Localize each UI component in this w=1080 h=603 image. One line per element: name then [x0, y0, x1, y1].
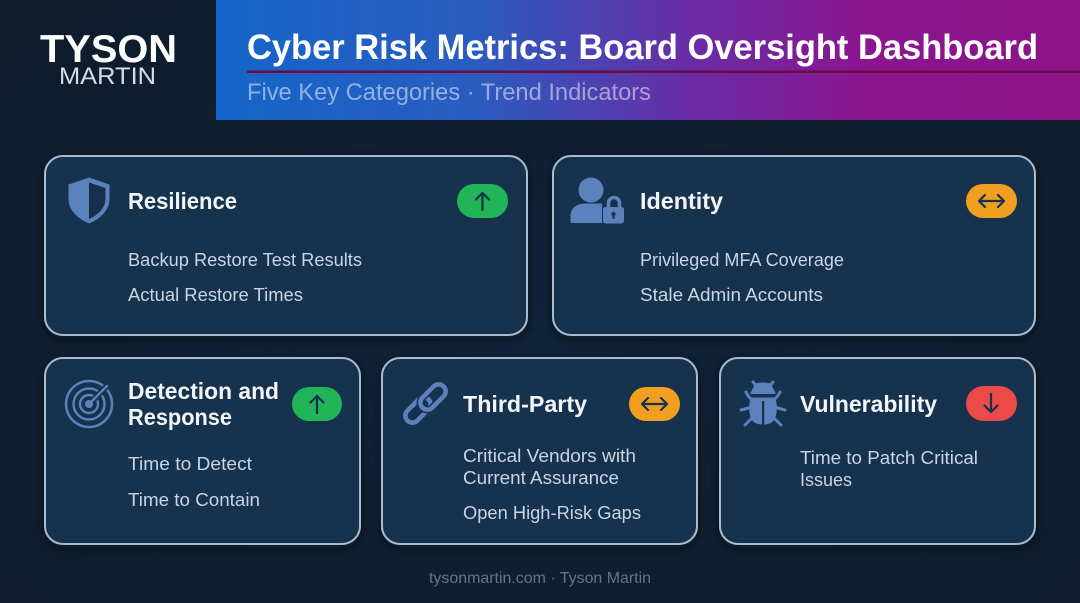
metric: Critical Vendors with — [463, 446, 636, 466]
title: Cyber Risk Metrics: Board Oversight Dashboard — [247, 28, 1038, 67]
metric — [800, 448, 978, 490]
metric: Stale Admin Accounts — [640, 285, 823, 305]
metric: Time to Contain — [128, 490, 260, 510]
panel: detection and response — [45, 358, 360, 544]
trend badge: down — [966, 386, 1017, 421]
icon: chain link — [402, 381, 449, 426]
heading: Response — [128, 404, 232, 430]
panel: identity — [553, 156, 1035, 335]
metric: Backup Restore Test Results — [128, 250, 362, 270]
metric — [463, 446, 636, 488]
icon: shield — [68, 178, 110, 224]
metric: Issues — [800, 470, 852, 490]
heading: Resilience — [128, 188, 237, 214]
metric: Privileged MFA Coverage — [640, 250, 844, 270]
logo: Tyson Martin: TYSON — [40, 28, 177, 71]
metric: Current Assurance — [463, 468, 619, 488]
trend badge: flat — [966, 184, 1017, 218]
metric: Open High-Risk Gaps — [463, 503, 641, 523]
heading — [128, 378, 279, 430]
metric: Actual Restore Times — [128, 285, 303, 305]
footer: tysonmartin.com · Tyson Martin — [429, 570, 651, 587]
header banner — [216, 0, 1080, 120]
heading: Vulnerability — [800, 391, 937, 417]
logo: Tyson Martin: MARTIN — [59, 63, 156, 90]
heading: Third-Party — [463, 391, 587, 417]
panel: resilience — [45, 156, 527, 335]
trend badge: up — [292, 387, 342, 421]
icon: bug — [741, 382, 785, 425]
panel: vulnerability — [720, 358, 1035, 544]
trend badge: up — [457, 184, 508, 218]
logo: Tyson Martin — [40, 28, 177, 90]
icon: radar target — [66, 381, 112, 427]
metric: Time to Patch Critical — [800, 448, 978, 468]
heading: Identity — [640, 188, 723, 214]
trend badge: flat — [629, 387, 680, 421]
panel: third-party — [382, 358, 697, 544]
subtitle: Five Key Categories · Trend Indicators — [247, 79, 651, 106]
icon: user with lock — [570, 178, 624, 224]
metric: Time to Detect — [128, 454, 252, 474]
heading: Detection and — [128, 378, 279, 404]
